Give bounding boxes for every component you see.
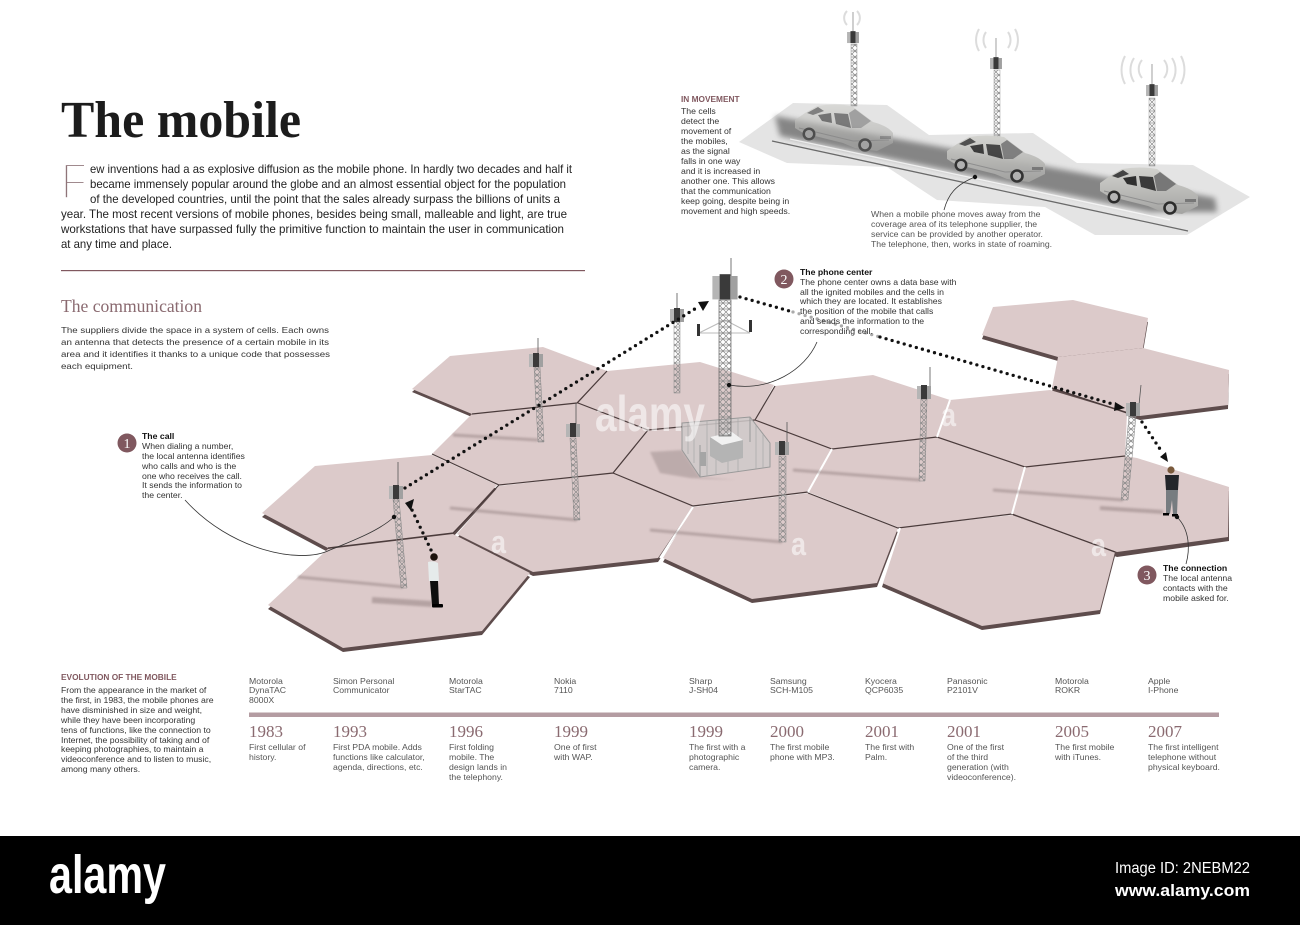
callout line: phone center — [727, 342, 817, 387]
timeline: 1999 Sharp — [689, 676, 746, 772]
callout line: the call — [185, 500, 396, 556]
timeline: 1999 Nokia: 7110 — [554, 685, 573, 695]
timeline: 1983: DynaTAC — [249, 685, 286, 695]
step 2: the phone center: all the ignited mobiles and the cells in — [800, 287, 944, 297]
evolution of the mobile text: videoconference and to listen to music, — [61, 754, 211, 764]
watermark: a — [491, 524, 506, 560]
dotted arrow: caller to local antenna — [405, 499, 431, 550]
step 2: the phone center: the position of the mobile that calls — [800, 306, 934, 316]
timeline: 1993: 1993 — [333, 722, 367, 741]
timeline: 1993 — [333, 676, 425, 772]
step 1: the call — [118, 431, 246, 500]
step 2: the phone center: 2 — [780, 273, 788, 288]
timeline: 1999 Nokia: 1999 — [554, 722, 588, 741]
timeline: 1983: history. — [249, 752, 276, 762]
timeline: 2001 Panasonic: generation (with — [947, 762, 1009, 772]
dotted arrow: far antenna to receiver — [1142, 422, 1168, 462]
footer image id: Image ID: 2NEBM22 — [1115, 860, 1250, 877]
person: caller — [428, 553, 443, 608]
communication text: each equipment. — [61, 361, 133, 371]
timeline: 2001 Panasonic — [947, 676, 1016, 782]
timeline: 1999 Sharp: Sharp — [689, 676, 712, 686]
step 1: the call: The call — [142, 431, 174, 441]
tower: left centre — [566, 403, 580, 520]
timeline: 1993: First PDA mobile. Adds — [333, 742, 422, 752]
timeline: 2001 Panasonic: P2101V — [947, 685, 978, 695]
timeline: 2001 Kyocera: Palm. — [865, 752, 887, 762]
timeline: 2001 Panasonic: videoconference). — [947, 772, 1016, 782]
panel: in movement road illustration — [739, 11, 1250, 235]
hexagon cell map — [262, 300, 1229, 652]
step 2: the phone center — [774, 267, 957, 336]
timeline: 1999 Sharp: The first with a — [689, 742, 746, 752]
timeline: 2007: Apple — [1148, 676, 1170, 686]
timeline: 1993: Simon Personal — [333, 676, 394, 686]
timeline: 1996: Motorola — [449, 676, 483, 686]
timeline: 2000: SCH-M105 — [770, 685, 813, 695]
timeline: 2001 Panasonic: One of the first — [947, 742, 1005, 752]
step 1: the call: 1 — [124, 437, 130, 452]
tower: main centre — [697, 258, 752, 436]
timeline: 2000 — [770, 676, 835, 762]
text: in movement: another one. This allows — [681, 176, 776, 186]
timeline: 2000: The first mobile — [770, 742, 830, 752]
text: roaming: When a mobile phone moves away from the — [871, 209, 1041, 219]
dotted arrow: local antenna to centre — [405, 301, 709, 488]
watermark — [491, 386, 1106, 563]
communication text: an antenna that detects the presence of a certain mobile in its — [61, 337, 330, 347]
step 2: the phone center: The phone center — [800, 267, 873, 277]
evolution of the mobile text: among many others. — [61, 764, 140, 774]
step 1: the call: one who receives the call. — [142, 471, 242, 481]
tower: behind — [670, 293, 684, 393]
evolution of the mobile text: EVOLUTION OF THE MOBILE — [61, 672, 177, 682]
evolution of the mobile text: tens of functions, like the connection to — [61, 725, 211, 735]
tower 3 — [1122, 56, 1184, 166]
watermark: a — [1091, 527, 1106, 563]
heading: the communication: The communication — [61, 296, 202, 316]
step 1: the call: who calls and who is the — [141, 461, 236, 471]
antenna towers — [389, 258, 1141, 588]
step 3: the connection: 3 — [1144, 569, 1150, 584]
text: roaming: coverage area of its telephone supplier, the — [871, 219, 1037, 229]
step 2: the phone center: which they are located. It establishes — [799, 296, 943, 306]
timeline: 2000: 2000 — [770, 722, 804, 741]
title: The mobile — [61, 92, 301, 149]
timeline: 1993: agenda, directions, etc. — [333, 762, 423, 772]
evolution of the mobile text: have disminished in size and weight, — [61, 705, 202, 715]
text: in movement: falls in one way — [681, 156, 741, 166]
step 3: the connection: The connection — [1163, 563, 1227, 573]
step 1: the call: When dialing a number, — [142, 441, 233, 451]
step 3: the connection: The local antenna — [1163, 573, 1232, 583]
timeline: 2000: Samsung — [770, 676, 807, 686]
tower: call — [389, 462, 407, 588]
timeline: 2001 Kyocera: Kyocera — [865, 676, 897, 686]
timeline: 1999 Sharp: 1999 — [689, 722, 723, 741]
cell edges (thickness) — [262, 304, 1229, 652]
text: in movement: the mobiles, — [681, 136, 728, 146]
tower: right centre — [917, 367, 931, 481]
step 2: the phone center: corresponding cell. — [800, 326, 873, 336]
timeline: 2007: 2007 — [1148, 722, 1182, 741]
watermark: a — [941, 397, 956, 433]
watermark: a — [791, 526, 806, 562]
step 1: the call: It sends the information to — [142, 480, 242, 490]
timeline: 1996: First folding — [449, 742, 494, 752]
timeline: 2007: I-Phone — [1148, 685, 1179, 695]
timeline: 1999 Nokia: One of first — [554, 742, 597, 752]
timeline: 1996: StarTAC — [449, 685, 482, 695]
tower: front hub — [775, 422, 789, 542]
timeline: 1999 Nokia: Nokia — [554, 676, 576, 686]
communication text: The suppliers divide the space in a system of cells. Each owns — [61, 325, 330, 335]
ground shadows — [298, 435, 1163, 604]
timeline: 1996: mobile. The — [449, 752, 494, 762]
footer band — [0, 836, 1300, 925]
text: in movement: and it is increased in — [681, 166, 760, 176]
timeline: 1996 — [449, 676, 507, 782]
intro paragraph: at any time and place. — [61, 238, 172, 251]
step 1: the call: the center. — [142, 490, 183, 500]
cell tops — [262, 300, 1229, 648]
evolution of the mobile text: the first, in 1983, the mobile phones are — [61, 695, 214, 705]
text: in movement — [681, 94, 790, 216]
text: in movement: as the signal — [681, 146, 730, 156]
text: roaming — [871, 209, 1052, 249]
timeline: 2007: The first intelligent — [1148, 742, 1219, 752]
step 3: the connection — [1138, 563, 1232, 603]
timeline: 1999 Nokia: with WAP. — [553, 752, 593, 762]
footer url: www.alamy.com — [1114, 881, 1250, 900]
timeline: 2001 Panasonic: 2001 — [947, 722, 981, 741]
timeline: 2001 Kyocera: The first with — [865, 742, 914, 752]
evolution of the mobile text — [60, 672, 214, 774]
timeline: 2005 — [1054, 676, 1115, 762]
timeline: 2001 Panasonic: of the third — [947, 752, 988, 762]
timeline: 1983 — [249, 676, 306, 762]
timeline: 1983: Motorola — [249, 676, 283, 686]
text: in movement: that the communication — [681, 186, 771, 196]
timeline: 2001 Panasonic: Panasonic — [947, 676, 988, 686]
dotted arrow: centre to far antenna — [740, 297, 1125, 411]
timeline: 2005: with iTunes. — [1054, 752, 1101, 762]
tower 2 — [976, 29, 1018, 137]
step 3: the connection: contacts with the — [1163, 583, 1228, 593]
timeline bar — [249, 712, 1219, 717]
text: in movement: The cells — [681, 106, 716, 116]
intro paragraph: ew inventions had a as explosive diffusion as the mobile phone. In hardly two decades and half it — [90, 163, 573, 176]
timeline: 2001 Kyocera: QCP6035 — [865, 685, 903, 695]
intro paragraph — [60, 153, 573, 251]
timeline: 2001 Kyocera: 2001 — [865, 722, 899, 741]
timeline: 1999 Sharp: photographic — [689, 752, 740, 762]
text: roaming: The telephone, then, works in state of roaming. — [871, 239, 1052, 249]
timeline: 1996: the telephony. — [449, 772, 503, 782]
car 2 — [947, 136, 1045, 183]
roaming callout line — [944, 175, 977, 210]
callout line: connection — [1175, 515, 1188, 564]
tower: upper left — [529, 338, 544, 442]
step 3: the connection: mobile asked for. — [1163, 593, 1229, 603]
evolution of the mobile text: Internet, the possibility of taking and of — [61, 735, 210, 745]
text: in movement: movement of — [681, 126, 732, 136]
timeline: 2005: Motorola — [1055, 676, 1089, 686]
intro paragraph: workstations that have surpassed fully the primitive function to maintain the user in communication — [60, 223, 564, 236]
text: in movement: keep going, despite being in — [681, 196, 789, 206]
timeline: 1983: 8000X — [249, 695, 274, 705]
timeline: 2000: phone with MP3. — [770, 752, 835, 762]
timeline: 1996: 1996 — [449, 722, 483, 741]
timeline: 1996: design lands in — [449, 762, 507, 772]
timeline: 1999 Sharp: camera. — [689, 762, 720, 772]
text: in movement: IN MOVEMENT — [681, 94, 740, 104]
drop cap: F — [61, 153, 87, 210]
intro paragraph: became immensely popular around the globe and an almost essential object for the population — [90, 178, 566, 191]
timeline: 2005: 2005 — [1055, 722, 1089, 741]
timeline: 1999 Sharp: J-SH04 — [689, 685, 718, 695]
timeline: 2001 Kyocera — [865, 676, 914, 762]
evolution of the mobile text: From the appearance in the market of — [61, 685, 207, 695]
evolution of the mobile text: keeping photographies, to maintain a — [61, 744, 204, 754]
step 2: the phone center: and sends the information to the — [800, 316, 924, 326]
cell seams — [328, 371, 1127, 583]
timeline: 1999 Nokia — [553, 676, 597, 762]
car 3 — [1100, 168, 1198, 215]
text: roaming: service can be provided by another operator. — [871, 229, 1043, 239]
timeline: 1993: Communicator — [333, 685, 390, 695]
evolution of the mobile text: while they have been incorporating — [60, 715, 195, 725]
base station fence and building — [650, 417, 770, 480]
person: receiver — [1163, 466, 1179, 516]
timeline: 1983: 1983 — [249, 722, 283, 741]
text: in movement: detect the — [681, 116, 719, 126]
intro paragraph: year. The most recent versions of mobile phones, besides being small, malleable and light, are true — [61, 208, 567, 221]
timeline: 1983: First cellular of — [249, 742, 306, 752]
text: in movement: movement and high speeds. — [681, 206, 790, 216]
step 2: the phone center: The phone center owns a data base with — [800, 277, 957, 287]
step 1: the call: the local antenna identifies — [142, 451, 246, 461]
timeline: 2007: physical keyboard. — [1148, 762, 1220, 772]
communication text: area and it identifies it thanks to a unique code that possesses — [61, 349, 331, 359]
tower 1 — [844, 11, 860, 106]
timeline: 2005: ROKR — [1055, 685, 1080, 695]
tower: right — [1121, 385, 1141, 500]
footer logo: alamy — [49, 845, 166, 905]
watermark: alamy — [595, 386, 705, 442]
timeline: 2005: The first mobile — [1055, 742, 1115, 752]
timeline: 2007: telephone without — [1148, 752, 1217, 762]
timeline: 2007 — [1148, 676, 1220, 772]
timeline: 1993: functions like calculator, — [333, 752, 425, 762]
car 1 (faded) — [795, 104, 893, 152]
communication text — [61, 325, 331, 371]
intro paragraph: of the developed countries, until the point that the sales already surpass the billions of units a — [90, 193, 560, 206]
